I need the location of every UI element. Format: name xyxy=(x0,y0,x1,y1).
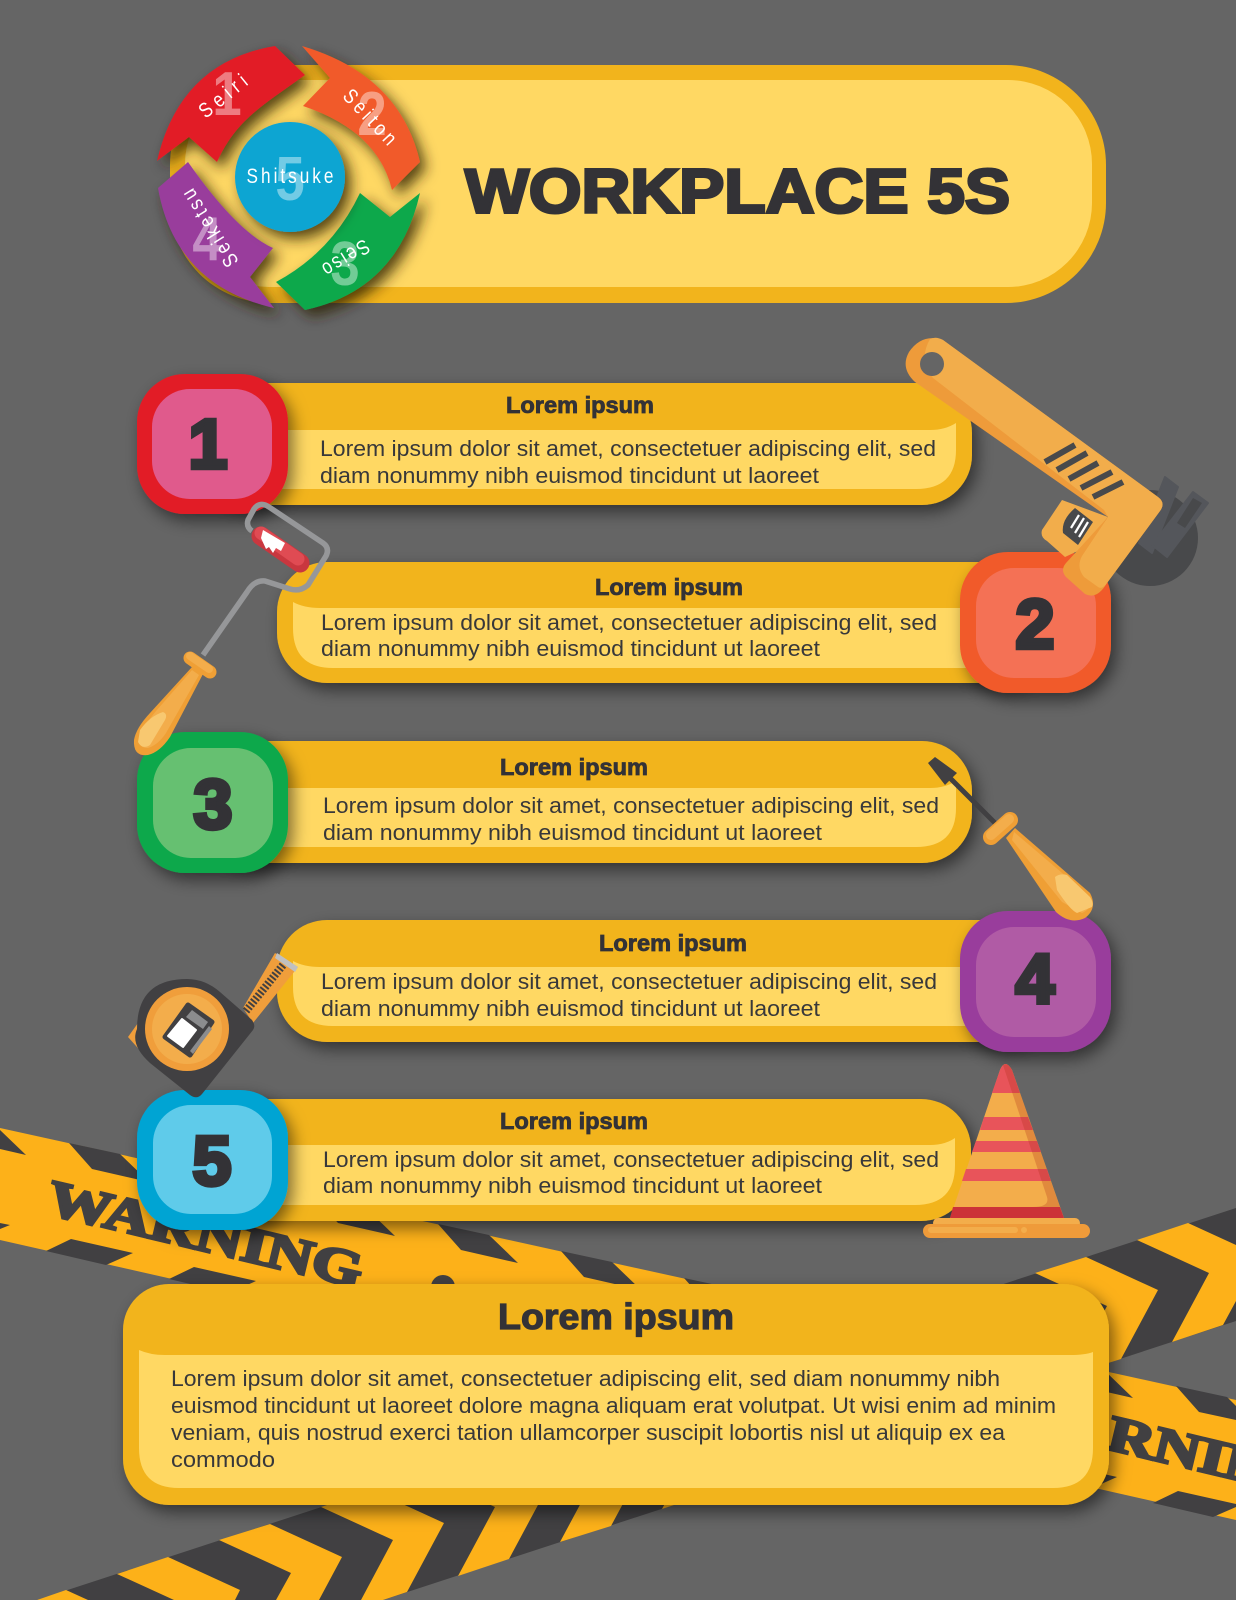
center circle: Shitsuke: Shitsuke xyxy=(247,166,333,188)
center circle: Shitsuke xyxy=(235,122,345,232)
warning tape: rising chevron tape xyxy=(37,1208,1236,1600)
row 1 xyxy=(137,374,972,514)
arrow: Seiton xyxy=(302,46,420,190)
arrow: Seiketsu xyxy=(158,162,274,308)
badge 5 xyxy=(137,1090,288,1230)
panel text: commodo xyxy=(171,1447,275,1472)
icon: drill xyxy=(906,338,1208,596)
arrow: Seiketsu: Seiketsu xyxy=(178,184,244,271)
arrow: Seiri: Seiri xyxy=(195,70,253,123)
arrow: Seiton: 2 xyxy=(357,80,387,149)
header banner xyxy=(170,65,1106,303)
badge 2 xyxy=(960,552,1111,693)
row 5: Lorem ipsum xyxy=(500,1108,648,1134)
panel text: euismod tincidunt ut laoreet dolore magna aliquam erat volutpat. Ut wisi enim ad minim xyxy=(171,1393,1056,1418)
warning tape: falling tape with WARNING text xyxy=(0,1128,1236,1520)
arrow: Seiri xyxy=(157,46,305,162)
row 3 xyxy=(137,732,972,873)
badge 2: 2 xyxy=(1016,585,1054,663)
row 2: diam nonummy nibh euismod tincidunt ut laoreet xyxy=(321,636,821,661)
badge 4: 4 xyxy=(1016,940,1055,1018)
badge 3 xyxy=(137,732,288,873)
title: WORKPLACE 5S xyxy=(465,158,1010,226)
row 2 xyxy=(277,552,1111,693)
row 2: Lorem ipsum dolor sit amet, consectetuer adipiscing elit, sed xyxy=(321,610,937,635)
row 5: Lorem ipsum dolor sit amet, consectetuer adipiscing elit, sed xyxy=(323,1147,939,1172)
row 4: diam nonummy nibh euismod tincidunt ut laoreet xyxy=(321,996,821,1021)
row 3: Lorem ipsum dolor sit amet, consectetuer adipiscing elit, sed xyxy=(323,793,939,818)
icon: paint roller xyxy=(134,504,327,755)
icon: tape measure xyxy=(128,953,298,1097)
row 4 xyxy=(277,911,1111,1052)
icon: traffic cone xyxy=(923,1064,1090,1238)
arrow: Seiton: Seiton xyxy=(338,85,401,150)
arrow: Seiri: 1 xyxy=(212,60,242,129)
warning tape: falling tape with WARNING text: WARNING xyxy=(42,1169,369,1298)
badge 3: 3 xyxy=(194,765,232,843)
row 2: Lorem ipsum xyxy=(595,574,743,600)
bottom panel xyxy=(123,1284,1109,1505)
badge 5: 5 xyxy=(193,1122,231,1200)
panel heading: Lorem ipsum xyxy=(498,1296,734,1337)
icon: screwdriver xyxy=(928,757,1093,920)
row 1: Lorem ipsum dolor sit amet, consectetuer adipiscing elit, sed xyxy=(320,436,936,461)
row 5: diam nonummy nibh euismod tincidunt ut laoreet xyxy=(323,1173,823,1198)
row 4: Lorem ipsum xyxy=(599,930,747,956)
badge 1 xyxy=(137,374,288,514)
arrow: Seiketsu: 4 xyxy=(192,205,222,274)
panel text: veniam, quis nostrud exerci tation ullamcorper suscipit lobortis nisl ut aliquip ex ea xyxy=(171,1420,1005,1445)
row 1: Lorem ipsum xyxy=(506,392,654,418)
row 4: Lorem ipsum dolor sit amet, consectetuer adipiscing elit, sed xyxy=(321,969,937,994)
arrow: Seiso: Seiso xyxy=(317,234,373,281)
panel text xyxy=(171,1366,1056,1472)
arrow: Seiso xyxy=(276,193,420,310)
center circle: Shitsuke: 5 xyxy=(275,145,305,214)
panel text: Lorem ipsum dolor sit amet, consectetuer adipiscing elit, sed diam nonummy nibh xyxy=(171,1366,1000,1391)
5S cycle wheel xyxy=(157,46,420,310)
row 1: diam nonummy nibh euismod tincidunt ut laoreet xyxy=(320,463,820,488)
badge 4 xyxy=(960,911,1111,1052)
badge 1: 1 xyxy=(189,405,227,483)
row 3: Lorem ipsum xyxy=(500,754,648,780)
row 3: diam nonummy nibh euismod tincidunt ut laoreet xyxy=(323,820,823,845)
row 5 xyxy=(137,1090,971,1230)
arrow: Seiso: 3 xyxy=(330,230,360,299)
